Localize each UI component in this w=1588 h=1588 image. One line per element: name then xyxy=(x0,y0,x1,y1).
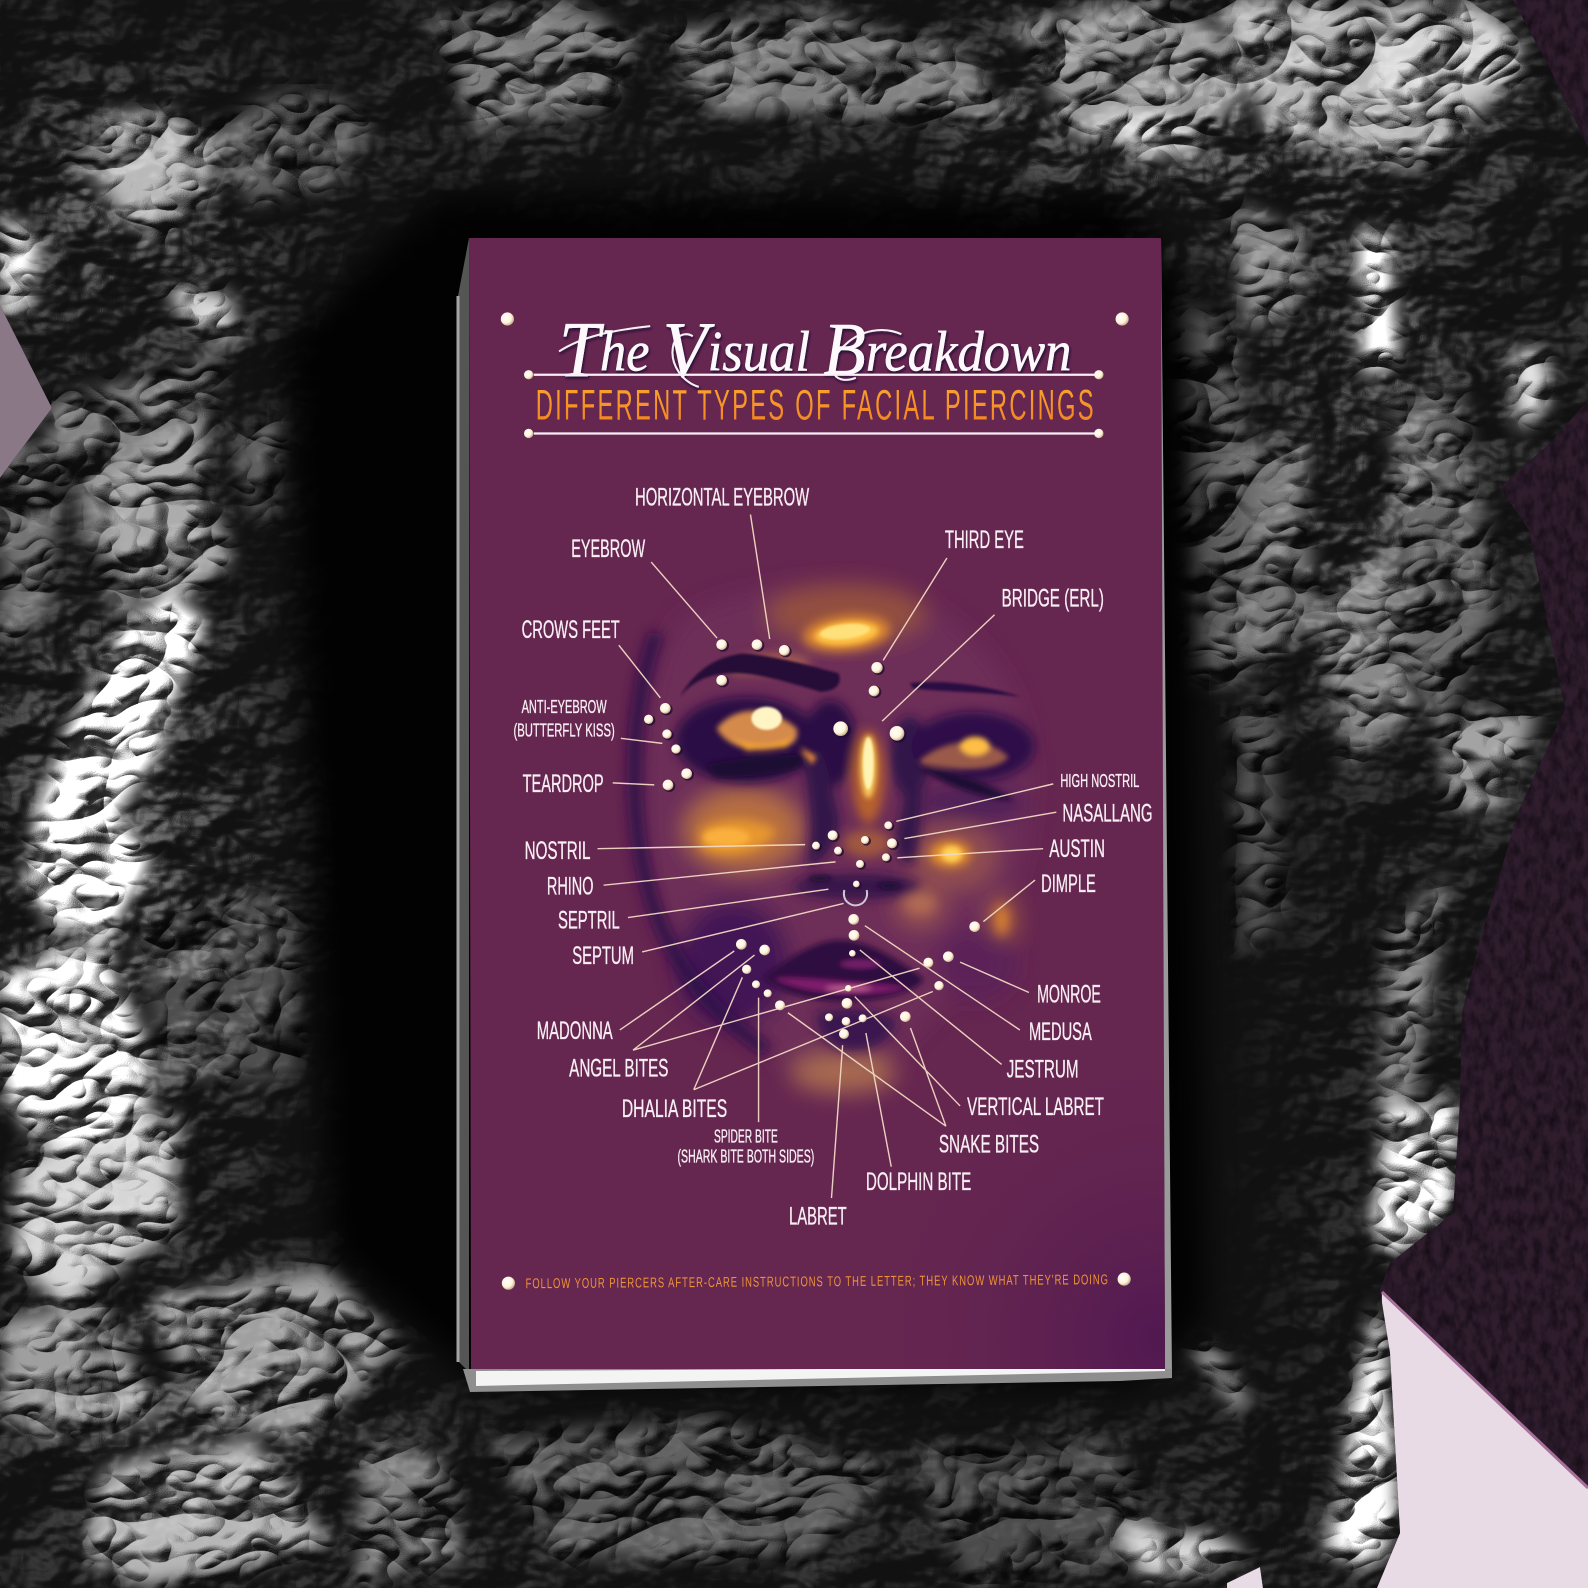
title: B xyxy=(823,309,866,392)
label: spider bite: (SHARK BITE BOTH SIDES) xyxy=(678,1147,814,1167)
label: teardrop: TEARDROP xyxy=(523,770,604,798)
soft base tones xyxy=(642,583,1031,1093)
label: spider bite xyxy=(678,1126,814,1167)
label: third eye: THIRD EYE xyxy=(945,526,1024,554)
label: high nostril: HIGH NOSTRIL xyxy=(1060,771,1139,791)
leader lines xyxy=(598,514,1056,1198)
label: horizontal eyebrow: HORIZONTAL EYEBROW xyxy=(635,483,809,511)
label: snake bites: SNAKE BITES xyxy=(939,1131,1039,1159)
corner studs xyxy=(501,312,1131,1290)
footer note: FOLLOW YOUR PIERCERS AFTER-CARE INSTRUCTIONS TO THE LETTER; THEY KNOW WHAT THEY'RE DOING xyxy=(526,1272,1109,1292)
label: rhino: RHINO xyxy=(547,872,593,900)
label: nostril: NOSTRIL xyxy=(525,837,590,865)
label: anti-eyebrow: ANTI-EYEBROW xyxy=(522,697,607,717)
title: isual xyxy=(708,321,823,384)
label: madonna: MADONNA xyxy=(537,1017,613,1045)
label: eyebrow: EYEBROW xyxy=(571,535,645,563)
title xyxy=(559,308,1072,395)
label: spider bite: SPIDER BITE xyxy=(714,1126,778,1146)
label: dhalia bites: DHALIA BITES xyxy=(622,1095,727,1123)
label: medusa: MEDUSA xyxy=(1029,1018,1092,1046)
illustration: face with orange lighting xyxy=(635,583,1035,1093)
dark void around the booklet xyxy=(285,195,1205,1385)
label: vertical labret: VERTICAL LABRET xyxy=(967,1093,1104,1121)
label: anti-eyebrow xyxy=(513,697,615,740)
title rules with end studs xyxy=(524,370,1104,438)
label: jestrum: JESTRUM xyxy=(1007,1056,1079,1084)
title: he xyxy=(600,321,663,384)
label: labret: LABRET xyxy=(789,1202,847,1230)
label: dimple: DIMPLE xyxy=(1041,870,1096,898)
label: anti-eyebrow: (BUTTERFLY KISS) xyxy=(513,720,615,740)
septum ring xyxy=(844,890,867,905)
label: crows feet: CROWS FEET xyxy=(522,616,620,644)
booklet page stack xyxy=(458,238,1172,1392)
label: dolphin bite: DOLPHIN BITE xyxy=(866,1168,971,1196)
title: reakdown xyxy=(866,321,1072,384)
label: monroe: MONROE xyxy=(1037,981,1101,1009)
label: bridge: BRIDGE (ERL) xyxy=(1002,585,1104,613)
label: austin: AUSTIN xyxy=(1049,835,1105,863)
subtitle: DIFFERENT TYPES OF FACIAL PIERCINGS xyxy=(536,381,1096,429)
label: septum: SEPTUM xyxy=(572,942,634,970)
label: nasallang: NASALLANG xyxy=(1062,799,1153,827)
title: T xyxy=(559,308,605,395)
label: septril: SEPTRIL xyxy=(558,907,620,935)
panel: poster card xyxy=(469,238,1165,1369)
label: angel bites: ANGEL BITES xyxy=(569,1055,668,1083)
piercing studs xyxy=(644,639,980,1039)
title: V xyxy=(663,308,715,395)
